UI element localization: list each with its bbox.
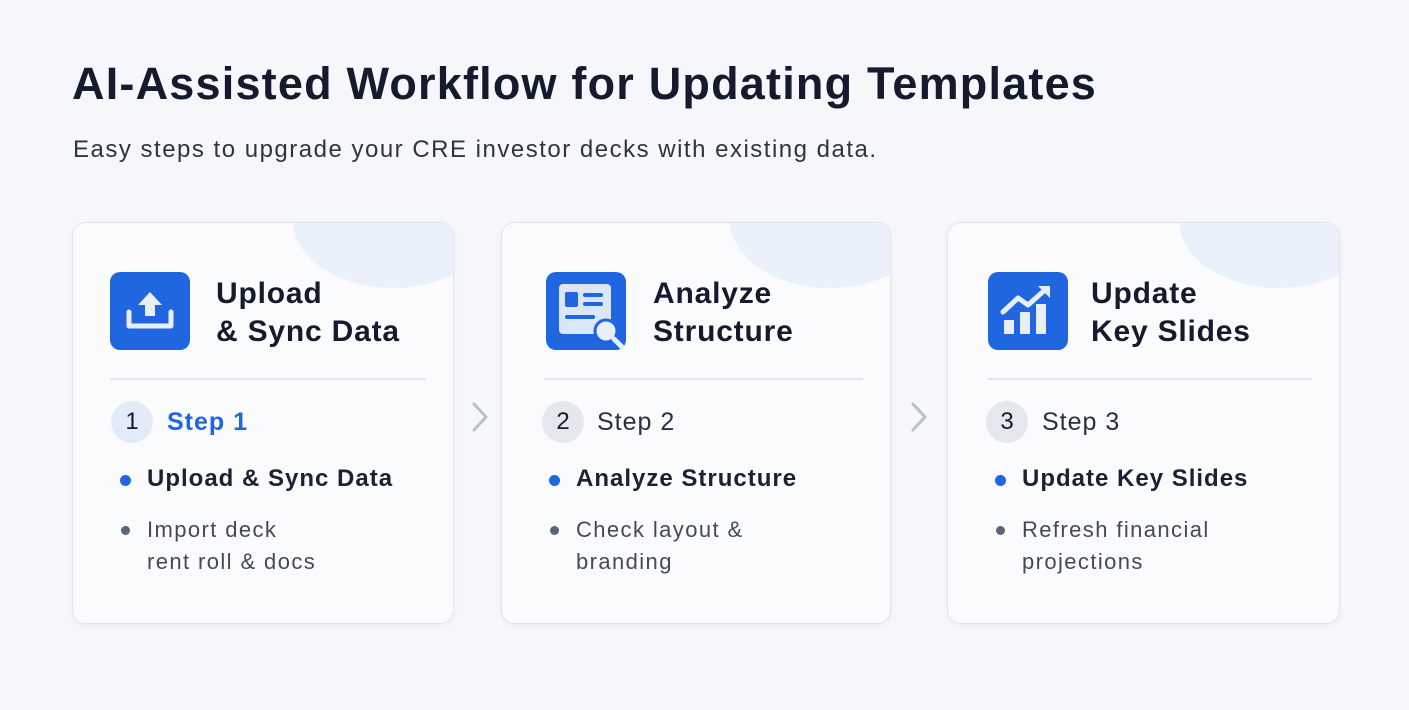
bullet detail — [1022, 514, 1210, 578]
bullet detail: Import deck — [147, 517, 277, 542]
step badge: 2 — [556, 408, 570, 435]
bullet main: Analyze Structure — [576, 465, 797, 492]
subtitle: Easy steps to upgrade your CRE investor decks with existing data. — [73, 136, 878, 163]
panel: step 1: Step 1 — [167, 408, 248, 436]
bullet detail: projections — [1022, 549, 1144, 574]
title: AI-Assisted Workflow for Updating Templates — [72, 58, 1097, 109]
heading: Upload — [216, 277, 322, 310]
step badge: 1 — [125, 408, 139, 435]
bullet main: Upload & Sync Data — [147, 465, 393, 492]
heading: Key Slides — [1091, 315, 1251, 348]
heading: Structure — [653, 315, 794, 348]
bullet main: Update Key Slides — [1022, 465, 1248, 492]
step badge — [111, 401, 153, 443]
panel: step 1 — [72, 222, 454, 624]
heading: Analyze — [653, 277, 772, 310]
bullet detail: Check layout & — [576, 517, 744, 542]
step badge — [542, 401, 584, 443]
icon: chart — [988, 272, 1068, 350]
bullet detail: branding — [576, 549, 673, 574]
bullet detail: Refresh financial — [1022, 517, 1210, 542]
panel: step 2 — [501, 222, 891, 624]
heading — [1091, 277, 1251, 348]
bullet detail: rent roll & docs — [147, 549, 316, 574]
bullet detail — [147, 514, 316, 578]
panel: step 3 — [947, 222, 1340, 624]
heading: Update — [1091, 277, 1197, 310]
panel: step 3: Step 3 — [1042, 408, 1120, 436]
bullet detail — [576, 514, 744, 578]
icon: analyze — [546, 272, 626, 350]
panel: step 2: Step 2 — [597, 408, 675, 436]
icon: upload — [110, 272, 190, 350]
arrow — [912, 402, 926, 432]
step badge — [986, 401, 1028, 443]
step badge: 3 — [1000, 408, 1014, 435]
arrow — [472, 402, 488, 432]
heading: & Sync Data — [216, 315, 400, 348]
heading — [653, 277, 794, 348]
heading — [216, 277, 400, 348]
